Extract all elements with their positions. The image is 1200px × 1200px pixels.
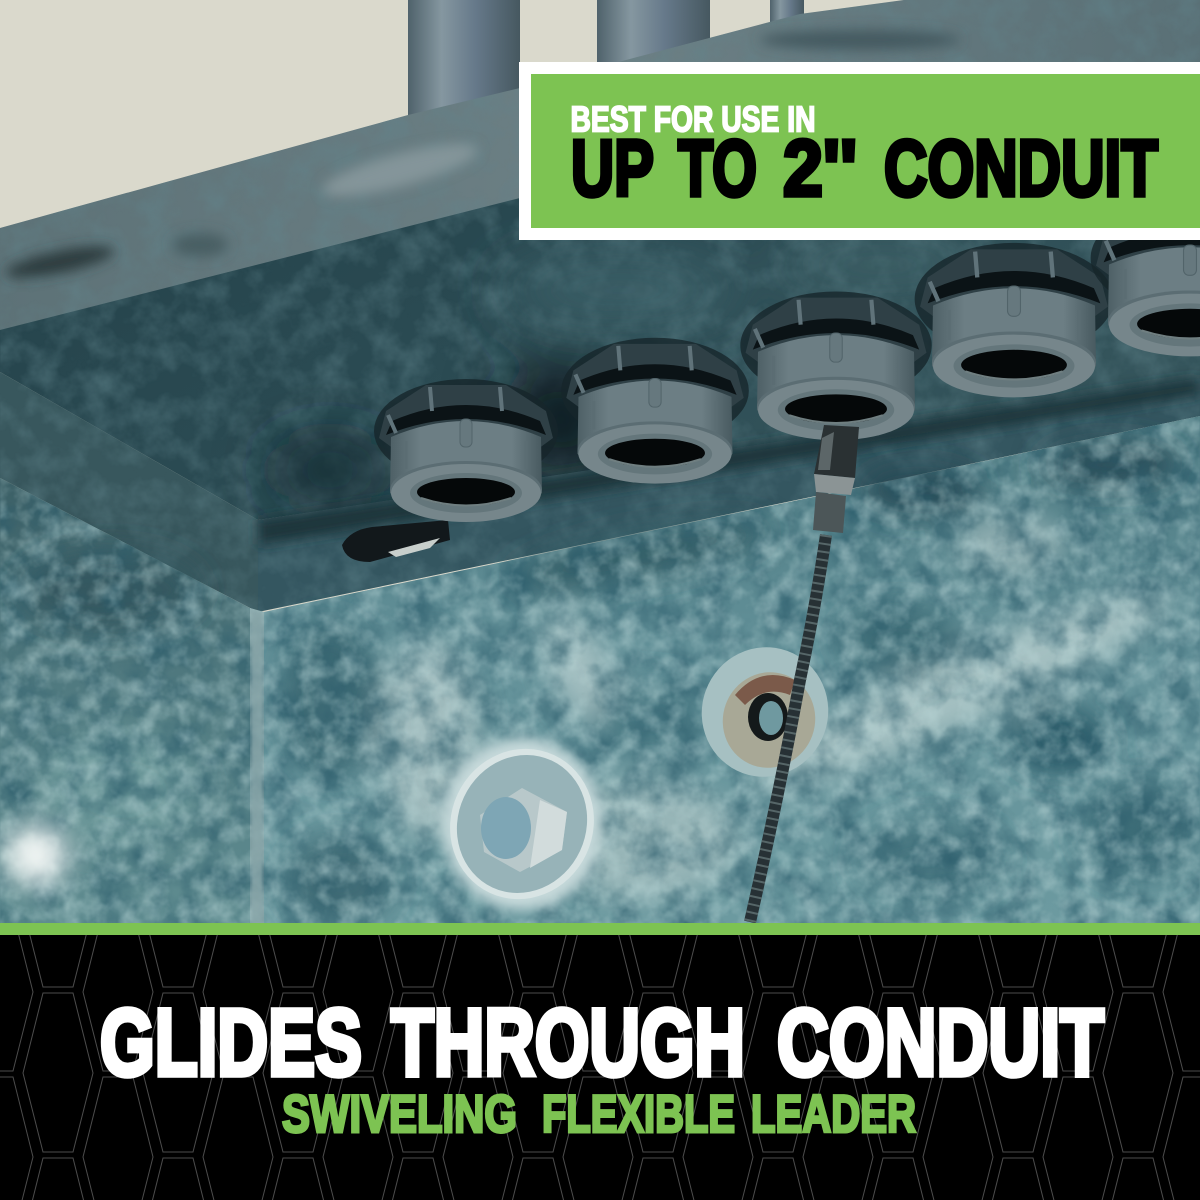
wall low-frequency patches bbox=[20, 441, 1200, 925]
pull cable bbox=[750, 535, 826, 922]
left wall panel bbox=[0, 478, 250, 925]
left flange texture bbox=[0, 372, 258, 612]
anchor hole washer bbox=[684, 629, 846, 795]
footer banner bbox=[0, 923, 1200, 1200]
main wall panel bbox=[264, 416, 1200, 925]
main headline: GLIDES bbox=[100, 990, 362, 1096]
bolt and washer bbox=[426, 725, 618, 923]
callout large heading: 2'' bbox=[783, 124, 857, 212]
slot in flange bbox=[342, 520, 450, 562]
photo: galvanized electrical box with conduit bbox=[0, 0, 1200, 935]
flange smudges bbox=[4, 30, 960, 284]
bushing 4 bbox=[915, 243, 1113, 397]
top flange of the box bbox=[0, 0, 1200, 332]
callout green panel bbox=[531, 74, 1200, 228]
main headline: CONDUIT bbox=[777, 990, 1104, 1096]
conduit pipes bbox=[408, 0, 804, 125]
subheadline: FLEXIBLE bbox=[542, 1085, 735, 1144]
background wall bbox=[0, 0, 1200, 935]
bushing 3 bbox=[740, 291, 932, 440]
panel seam bbox=[250, 608, 264, 925]
main headline bbox=[100, 990, 1104, 1096]
subheadline: LEADER bbox=[751, 1085, 916, 1144]
callout small heading: BEST FOR USE IN bbox=[570, 98, 816, 140]
swivel leader bbox=[813, 425, 859, 533]
main headline: THROUGH bbox=[391, 990, 745, 1096]
wall light grain bbox=[0, 416, 1200, 925]
callout large heading bbox=[571, 124, 1158, 212]
bushing 1 bbox=[374, 379, 558, 522]
back flange bbox=[258, 378, 1200, 612]
subheadline: SWIVELING bbox=[282, 1085, 517, 1144]
bright reflection bbox=[4, 825, 68, 885]
underside of the box bbox=[0, 190, 1200, 520]
callout large heading: UP bbox=[571, 124, 654, 212]
panel seam highlight bbox=[252, 612, 262, 925]
callout large heading: TO bbox=[678, 124, 757, 212]
flange texture bbox=[0, 0, 1200, 332]
wall dark grain bbox=[0, 416, 1200, 925]
bushing 2 bbox=[561, 338, 749, 484]
bushing 5 bbox=[1091, 202, 1200, 356]
underside mottling bbox=[270, 243, 990, 500]
left flange bbox=[0, 372, 258, 612]
honeycomb pattern bbox=[0, 935, 1200, 1200]
back flange shadow bbox=[258, 378, 1200, 545]
subheadline bbox=[282, 1085, 916, 1144]
callout: best for use bbox=[519, 62, 1200, 240]
cable twist highlight bbox=[750, 535, 826, 922]
underside texture bbox=[0, 190, 1200, 520]
footer black panel bbox=[0, 935, 1200, 1200]
back flange texture bbox=[258, 378, 1200, 612]
